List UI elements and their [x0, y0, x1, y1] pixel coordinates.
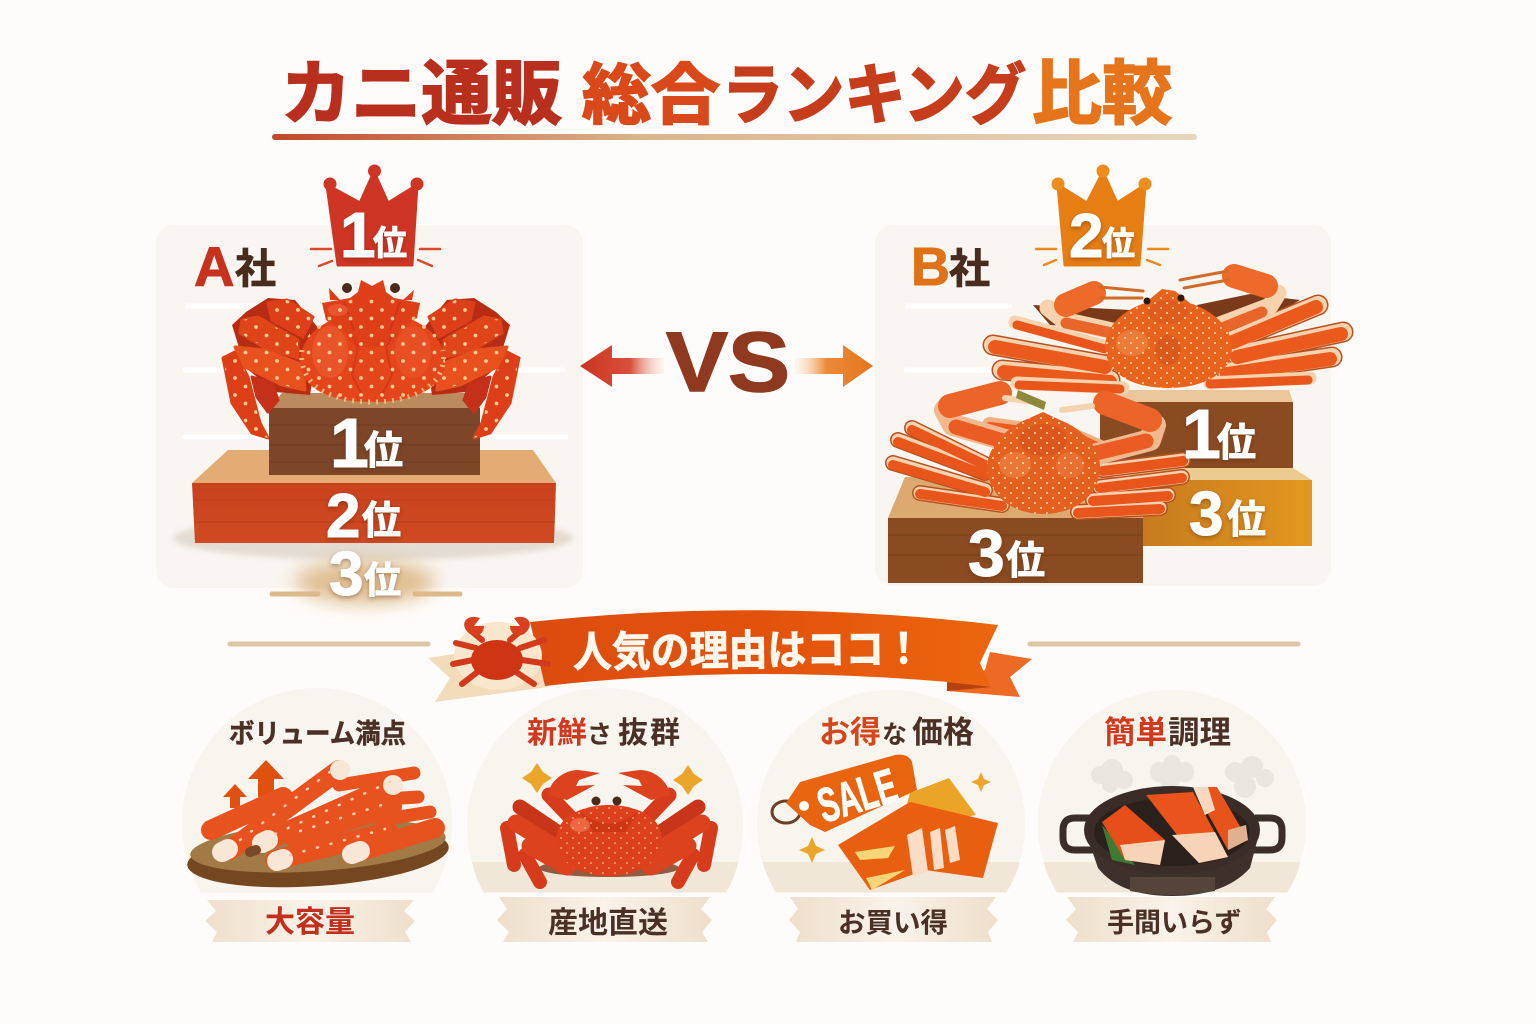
- arrow: left to company A: [580, 345, 664, 387]
- ribbon label: [497, 897, 712, 942]
- ribbon label: [205, 897, 415, 942]
- rank labels on podium: [968, 395, 1266, 590]
- title: カニ通販: [281, 38, 562, 139]
- title: [281, 38, 1172, 139]
- rank labels on podium: 1: [1182, 395, 1221, 473]
- rank labels on podium: [326, 404, 403, 609]
- heading: [527, 708, 680, 752]
- label: A company: 社: [235, 235, 276, 295]
- icon: sparkles: [799, 772, 991, 863]
- label: B company: 社: [949, 235, 990, 295]
- crown: first place: [311, 164, 440, 271]
- VS label with arrows: [580, 315, 873, 409]
- crown: first place: 1: [340, 199, 376, 271]
- card: volume: [182, 688, 452, 958]
- rank labels on podium: 1: [330, 404, 369, 482]
- icon: sparkles: [522, 763, 703, 795]
- illustration: snow crab upper: [993, 271, 1343, 389]
- ribbon label: 大容量: [265, 897, 355, 941]
- card: freshness: [467, 688, 743, 964]
- heading: な: [882, 715, 907, 751]
- crown: second place: 位: [1102, 217, 1135, 265]
- podium: first place block: [269, 393, 480, 475]
- feature cards: [182, 688, 1306, 964]
- heading: 簡単: [1104, 707, 1167, 753]
- rank labels on podium: 2: [326, 482, 360, 551]
- card: easy cooking: [1038, 690, 1306, 958]
- rank labels on podium: 3: [329, 540, 363, 609]
- crown: second place: 2: [1069, 202, 1103, 271]
- heading: 新鮮: [527, 708, 587, 752]
- section divider lines: [230, 642, 1298, 646]
- podium: second place block: [192, 450, 556, 543]
- heading: 価格: [912, 707, 974, 752]
- rank labels on podium: 位: [1217, 412, 1256, 468]
- title: 比較: [1032, 38, 1172, 139]
- podium: third place base: [272, 560, 460, 604]
- crown: second place: [1036, 164, 1168, 271]
- card: price: [757, 690, 1025, 958]
- panel: A company: [156, 164, 583, 609]
- rank labels on podium: 位: [364, 550, 401, 604]
- rank labels on podium: 位: [362, 490, 401, 546]
- podium: third place brown block: [888, 477, 1143, 583]
- icon: sale tag and tickets: SALE: [811, 759, 903, 833]
- icon: pot with crab: [1063, 786, 1282, 896]
- illustration: king crab: [223, 280, 519, 438]
- banner text: 人気の理由はココ！: [573, 615, 923, 680]
- ribbon label: 産地直送: [548, 898, 668, 942]
- podium: first place block: [1100, 390, 1293, 468]
- heading: [819, 707, 974, 752]
- podium: third place orange block: [1125, 468, 1312, 546]
- icon: red crab: [507, 770, 711, 882]
- ribbon label: お買い得: [838, 900, 948, 940]
- ribbon label: 手間いらず: [1107, 901, 1241, 940]
- icon: small crab: [453, 617, 548, 690]
- crown: first place: 位: [373, 216, 407, 265]
- icon: crab legs on plate: [185, 768, 451, 895]
- icon: steam: [1091, 755, 1274, 798]
- heading: ボリューム満点: [229, 712, 406, 751]
- label: A company: [194, 235, 276, 298]
- podium: shadow: [173, 516, 573, 560]
- heading: [1104, 707, 1231, 753]
- rank labels on podium: 位: [1006, 530, 1045, 586]
- heading: 調理: [1168, 707, 1231, 753]
- ribbon label: [789, 897, 998, 942]
- ribbon label: [1066, 897, 1277, 942]
- rank labels on podium: 3: [1189, 480, 1223, 549]
- label: B company: [911, 235, 990, 297]
- heading: 抜群: [618, 708, 680, 752]
- arrow: right to company B: [795, 345, 873, 387]
- heading: さ: [587, 715, 612, 751]
- rank labels on podium: 位: [1227, 489, 1266, 545]
- icon: sale tag and tickets: [772, 755, 998, 890]
- title: 総合: [582, 42, 720, 138]
- title: ランキング: [722, 42, 1026, 138]
- VS text: VS: [666, 315, 790, 409]
- icon: up arrows: [223, 760, 284, 808]
- rank labels on podium: 位: [364, 420, 403, 476]
- label: A company: A: [194, 235, 234, 298]
- illustration: snow crab lower: [893, 390, 1183, 514]
- label: B company: B: [911, 237, 950, 297]
- rank labels on podium: 3: [968, 516, 1005, 590]
- banner: reasons for popularity: [428, 610, 1032, 702]
- heading: お得: [819, 707, 881, 752]
- panel: B company: [875, 164, 1343, 590]
